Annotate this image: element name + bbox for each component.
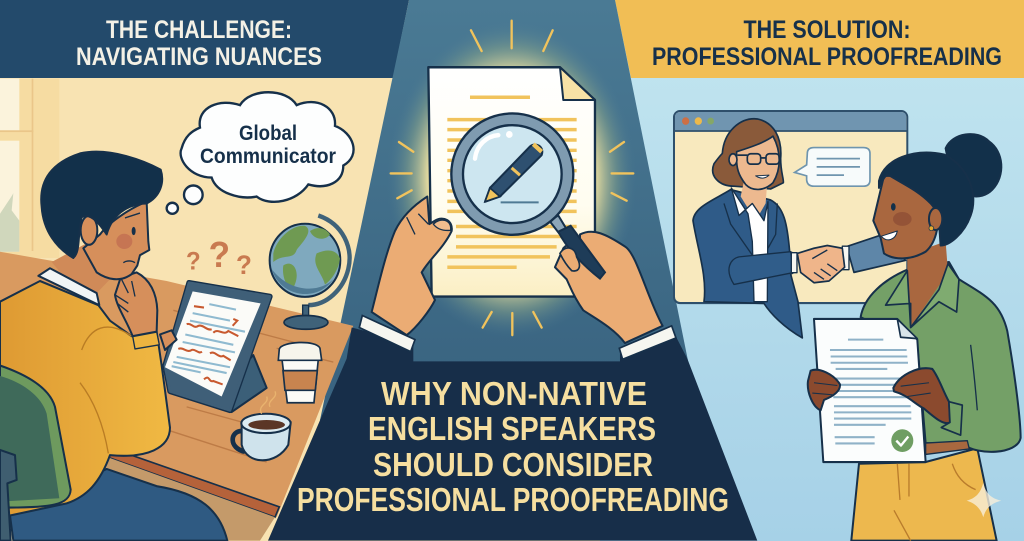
bun xyxy=(946,134,1001,196)
icon: question marks xyxy=(186,235,252,280)
title xyxy=(297,375,729,518)
panel: challenge background xyxy=(0,0,420,541)
neck xyxy=(52,238,110,293)
figure: right hand xyxy=(555,232,663,343)
right hand xyxy=(893,368,950,423)
hair xyxy=(41,152,162,258)
icon: question marks: ? xyxy=(236,250,252,280)
icon: sparkle xyxy=(967,483,1001,517)
header: solution band xyxy=(615,0,1024,78)
illustration: glow behind document xyxy=(387,21,637,338)
ear xyxy=(929,208,942,230)
icon: sun rays xyxy=(391,21,633,335)
left hand xyxy=(808,370,840,410)
illustration: handshake xyxy=(797,235,906,283)
trousers xyxy=(10,469,227,541)
speech bubble xyxy=(795,148,870,186)
heading: the challenge: THE CHALLENGE: xyxy=(106,16,292,44)
header: challenge band xyxy=(0,0,409,78)
check badge xyxy=(891,429,913,452)
hair xyxy=(879,153,973,245)
panel: solution background xyxy=(600,0,1024,541)
shirt xyxy=(731,188,768,302)
figure: client holding document xyxy=(808,134,1021,541)
title: PROFESSIONAL PROOFREADING xyxy=(297,481,729,518)
neck xyxy=(907,241,948,328)
jacket xyxy=(693,190,802,338)
icon: tablet with marked-up text xyxy=(165,283,270,412)
belt xyxy=(926,441,969,454)
figure: left hand xyxy=(372,197,452,335)
trousers xyxy=(851,448,997,541)
panel: central wedge xyxy=(320,0,700,420)
panel: video call window xyxy=(674,111,907,303)
icon: magnifying glass with pen xyxy=(451,113,605,279)
title: ENGLISH SPEAKERS xyxy=(368,410,656,447)
panel: title block and suit sleeves xyxy=(268,315,757,541)
glasses xyxy=(737,153,747,158)
face xyxy=(83,202,149,279)
face xyxy=(873,176,938,258)
hand on chin xyxy=(115,272,157,336)
title: SHOULD CONSIDER xyxy=(373,446,653,483)
text: global communicator: Global xyxy=(239,122,297,145)
heading: the solution: THE SOLUTION: xyxy=(744,16,910,44)
figure: proofreader on screen xyxy=(693,119,802,338)
title: WHY NON-NATIVE xyxy=(381,375,647,412)
text: global communicator: Communicator xyxy=(200,145,336,168)
icon: thought bubble xyxy=(167,92,354,214)
figure: man at desk xyxy=(0,152,227,541)
document xyxy=(814,319,926,462)
icon: coffee mug xyxy=(233,391,291,460)
hair xyxy=(713,119,783,189)
cuff xyxy=(791,253,797,273)
icon: question marks: ? xyxy=(209,235,230,275)
chair xyxy=(0,365,71,508)
document under magnifier xyxy=(428,67,595,297)
icon: question marks: ? xyxy=(186,248,201,276)
text: global communicator xyxy=(200,122,336,168)
neck xyxy=(741,181,767,221)
pen xyxy=(485,144,542,202)
ear xyxy=(81,216,97,245)
collar xyxy=(38,268,99,305)
face xyxy=(736,136,779,189)
right cuff xyxy=(619,326,676,359)
icon: globe xyxy=(270,216,350,329)
heading: navigating nuances: NAVIGATING NUANCES xyxy=(76,43,322,71)
left cuff xyxy=(359,315,415,352)
scene: desk xyxy=(0,252,353,541)
cuff xyxy=(941,402,962,435)
window xyxy=(0,79,59,258)
sweater xyxy=(0,281,170,515)
icon: takeaway coffee cup xyxy=(278,342,322,403)
shirt xyxy=(861,262,1021,452)
